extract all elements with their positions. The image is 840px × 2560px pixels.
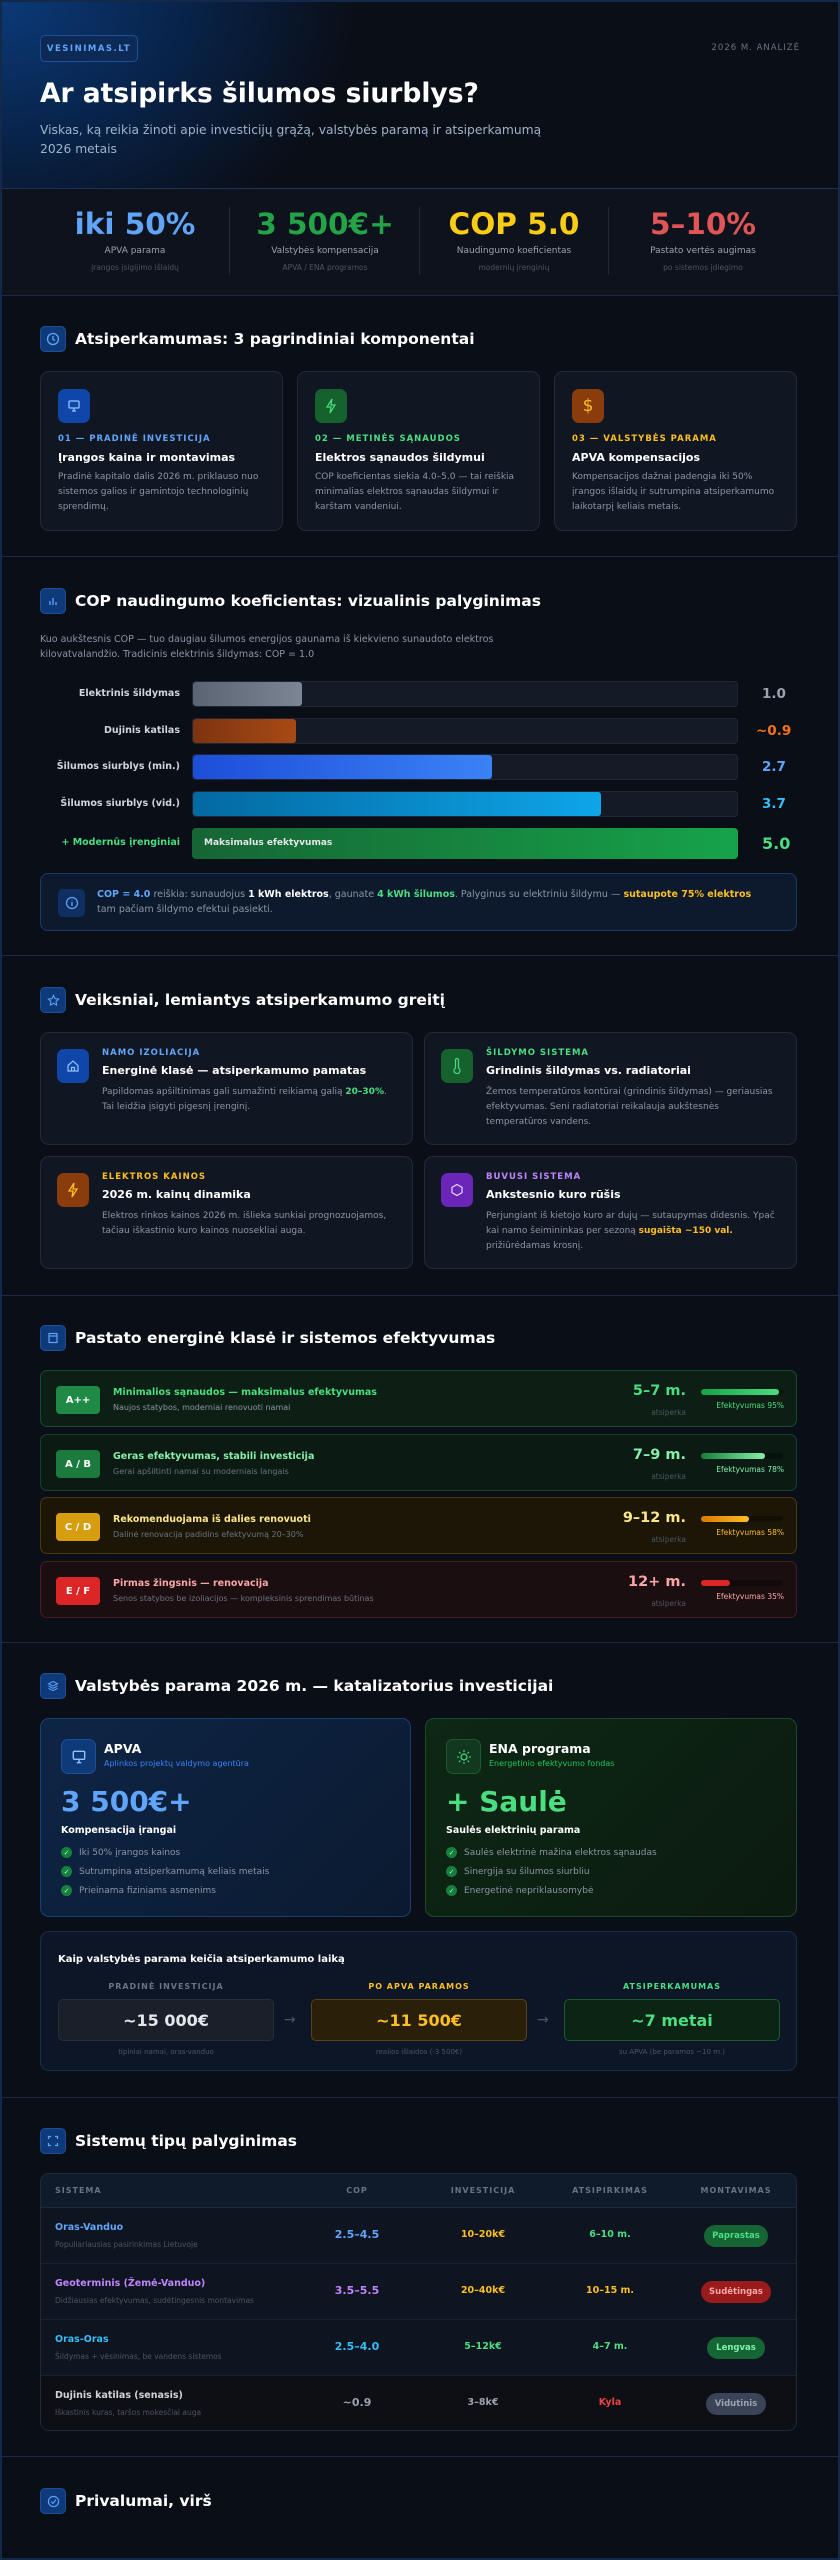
- icon: sun: [446, 1739, 481, 1774]
- bar: modern: 5.0: [762, 834, 790, 853]
- bar: HP min: Šilumos siurblys (min.): [57, 761, 180, 772]
- heading: components: Atsiperkamumas: 3 pagrindiniai komponentai: [75, 330, 475, 348]
- step: initial: ~15 000€: [123, 2010, 209, 2030]
- row: air-air: Lengvas: [716, 2343, 756, 2353]
- row: A/B: Geras efektyvumas, stabili investicija: [113, 1451, 314, 1462]
- row: E/F: Pirmas žingsnis — renovacija: [113, 1578, 269, 1589]
- card: APVA: Kompensacija įrangai: [61, 1825, 176, 1836]
- card: APVA: Aplinkos projektų valdymo agentūra: [104, 1759, 249, 1768]
- row: A/B: Gerai apšiltinti namai su moderniais langais: [113, 1467, 289, 1476]
- card: heating system: [424, 1032, 797, 1145]
- card: state support: [554, 371, 797, 531]
- row: E/F: E / F: [66, 1586, 90, 1596]
- step: after APVA: ~11 500€: [376, 2010, 462, 2030]
- card: ENA: Sinergija su šilumos siurbliu: [464, 1866, 590, 1876]
- heading: factors: Veiksniai, lemiantys atsiperkamumo greitį: [75, 991, 445, 1009]
- icon: dollar: [572, 389, 604, 423]
- row: geothermal: 10–15 m.: [586, 2285, 634, 2296]
- stat: APVA: iki 50%: [75, 207, 195, 241]
- card: state support: APVA kompensacijos: [572, 451, 700, 464]
- step: payback: ATSIPERKAMUMAS: [623, 1982, 721, 1991]
- row: A/B: A / B: [65, 1458, 91, 1470]
- stat: COP: Naudingumo koeficientas: [457, 246, 571, 256]
- stat: value: [650, 207, 756, 272]
- row: air-water: 2.5–4.5: [335, 2228, 379, 2241]
- row: air-water: Populiariausias pasirinkimas Lietuvoje: [55, 2240, 198, 2249]
- bar: gas: Dujinis katilas: [104, 725, 180, 736]
- card: state support: 03 — VALSTYBĖS PARAMA: [572, 434, 717, 444]
- card: APVA: ✓: [64, 1868, 69, 1876]
- row: geothermal: 20–40k€: [461, 2285, 505, 2296]
- card: previous system: [424, 1156, 797, 1269]
- card: previous system: BUVUSI SISTEMA: [486, 1172, 581, 1182]
- step: payback: su APVA (be paramos ~10 m.): [619, 2048, 725, 2056]
- step: after APVA: realios išlaidos (-3 500€): [376, 2048, 462, 2056]
- card: APVA: Sutrumpina atsiperkamumą keliais metais: [79, 1866, 269, 1876]
- row: air-air: [41, 2320, 798, 2376]
- header: [0, 0, 840, 188]
- bar: HP avg: [60, 791, 786, 817]
- bar: HP avg: Šilumos siurblys (vid.): [60, 798, 180, 809]
- card: ENA: Energetinė nepriklausomybė: [464, 1886, 593, 1896]
- card: ENA: ✓: [449, 1848, 454, 1856]
- row: C/D: Efektyvumas 58%: [716, 1528, 784, 1537]
- row: air-water: Paprastas: [712, 2231, 760, 2241]
- card: insulation: NAMO IZOLIACIJA: [102, 1048, 200, 1058]
- row: A/B: 7–9 m.: [633, 1447, 686, 1463]
- step: initial: tipiniai namai, oras-vanduo: [118, 2048, 214, 2056]
- row: gas boiler: Kyla: [599, 2397, 621, 2408]
- row: E/F: atsiperka: [651, 1599, 686, 1608]
- stat: compensation: [256, 207, 394, 272]
- row: A/B: atsiperka: [651, 1472, 686, 1481]
- row: A++: atsiperka: [651, 1408, 686, 1417]
- stat: APVA: APVA parama: [105, 246, 165, 256]
- stats band: [0, 189, 840, 295]
- card: initial investment: Pradinė kapitalo dalis 2026 m. priklauso nuo sistemos galios ir gamintojo technologinių sprendimų.: [58, 472, 258, 512]
- row: gas boiler: Iškastinis kuras, taršos mokesčiai auga: [55, 2408, 201, 2417]
- row: air-air: 5–12k€: [464, 2341, 502, 2352]
- card: ENA: ENA programa: [489, 1741, 591, 1756]
- card: ENA: [425, 1718, 797, 1917]
- bar: electric: 1.0: [762, 686, 786, 702]
- icon: info: [58, 889, 85, 917]
- step: initial: PRADINĖ INVESTICIJA: [108, 1982, 224, 1991]
- card: insulation: Energinė klasė — atsiperkamumo pamatas: [102, 1064, 366, 1077]
- card: state support: Kompensacijos dažnai padengia iki 50% įrangos išlaidų ir sutrumpina atsiperkamumo laikotarpį keliais metais.: [572, 472, 774, 512]
- row: gas boiler: [41, 2376, 798, 2432]
- card: electricity prices: ELEKTROS KAINOS: [102, 1172, 206, 1182]
- heading: advantages: [40, 2488, 212, 2514]
- row: gas boiler: Dujinis katilas (senasis): [55, 2390, 183, 2401]
- title: Ar atsipirks šilumos siurblys?: [40, 78, 479, 109]
- card: heating system: Žemos temperatūros kontūrai (grindinis šildymas) — geriausias efektyvumas. Seni radiatoriai reikalauja aukštesnės temperatūros vandens.: [486, 1087, 773, 1127]
- row: C/D: Rekomenduojama iš dalies renovuoti: [113, 1514, 311, 1525]
- heading: factors: [40, 987, 445, 1013]
- row: C/D: 9–12 m.: [623, 1510, 686, 1526]
- row: geothermal: Didžiausias efektyvumas, sudėtingesnis montavimas: [55, 2296, 254, 2305]
- row: air-air: 4–7 m.: [593, 2341, 627, 2352]
- card: initial investment: Įrangos kaina ir montavimas: [58, 451, 235, 464]
- row: E/F: [40, 1561, 797, 1618]
- stat: APVA: [75, 207, 195, 272]
- step: payback: ~7 metai: [631, 2010, 713, 2030]
- card: initial investment: [40, 371, 283, 531]
- card: insulation: [40, 1032, 413, 1145]
- card: annual costs: Elektros sąnaudos šildymui: [315, 451, 485, 464]
- row: air-air: 2.5–4.0: [335, 2340, 379, 2353]
- bar: gas: ~0.9: [756, 723, 791, 739]
- row: C/D: Dalinė renovacija padidins efektyvumą 20–30%: [113, 1530, 304, 1539]
- heading: system comparison: [40, 2128, 297, 2154]
- row: C/D: atsiperka: [651, 1535, 686, 1544]
- card: annual costs: [297, 371, 540, 531]
- icon: dollar: $: [583, 396, 593, 416]
- row: A/B: Efektyvumas 78%: [716, 1465, 784, 1474]
- row: air-water: Oras-Vanduo: [55, 2222, 123, 2233]
- heading: state support: [40, 1673, 553, 1699]
- card: ENA: + Saulė: [446, 1785, 567, 1818]
- icon: bolt: [315, 389, 347, 423]
- row: A++: 5–7 m.: [633, 1383, 686, 1399]
- row: gas boiler: ~0.9: [343, 2396, 371, 2409]
- row: gas boiler: 3–8k€: [468, 2397, 498, 2408]
- row: A/B: [40, 1434, 797, 1491]
- card: ENA: Saulės elektrinių parama: [446, 1825, 580, 1836]
- icon: monitor: [58, 389, 90, 423]
- stat: COP: modernių įrenginių: [478, 263, 550, 272]
- step: payback: [564, 1982, 780, 2056]
- card: heating system: Grindinis šildymas vs. radiatoriai: [486, 1064, 691, 1077]
- stat: value: po sistemos įdiegimo: [663, 263, 743, 272]
- card: APVA: [40, 1718, 411, 1917]
- heading: components: [40, 326, 475, 352]
- heading: state support: Valstybės parama 2026 m. — katalizatorius investicijai: [75, 1677, 553, 1695]
- table header: INVESTICIJA: [451, 2186, 515, 2195]
- row: geothermal: Sudėtingas: [709, 2287, 763, 2297]
- row: geothermal: 3.5–5.5: [335, 2284, 379, 2297]
- card: annual costs: 02 — METINĖS SĄNAUDOS: [315, 434, 461, 444]
- row: air-air: Oras-Oras: [55, 2334, 109, 2345]
- stat: compensation: Valstybės kompensacija: [271, 246, 379, 256]
- row: A++: Naujos statybos, moderniai renovuoti namai: [113, 1403, 290, 1412]
- card: annual costs: COP koeficientas siekia 4.0–5.0 — tai reiškia minimalias elektros sąnaudas šildymui ir karštam vandeniui.: [315, 472, 514, 512]
- stat: COP: [449, 207, 579, 272]
- bar: HP min: 2.7: [762, 759, 786, 775]
- heading: advantages: Privalumai, virš: [75, 2492, 212, 2510]
- row: A++: [40, 1370, 797, 1427]
- card: previous system: Perjungiant iš kietojo kuro ar dujų — sutaupymas didesnis. Ypač kai namo šeimininkas per sezoną sugaišta ~150 val. prižiūrėdamas krosnį.: [486, 1211, 775, 1251]
- heading: COP: [40, 588, 541, 614]
- bar: modern: [61, 828, 790, 859]
- badge: VESINIMAS.LT: [47, 44, 131, 54]
- card: APVA: Prieinama fiziniams asmenims: [79, 1886, 216, 1896]
- step: initial: [58, 1982, 274, 2056]
- card: electricity prices: 2026 m. kainų dinamika: [102, 1188, 251, 1201]
- bar: electric: [79, 681, 786, 707]
- stat: value: 5–10%: [650, 207, 756, 241]
- bar: modern: + Modernūs įrenginiai: [61, 837, 180, 848]
- bar: HP min: [57, 754, 786, 780]
- icon: house: [57, 1049, 89, 1083]
- table header: COP: [346, 2186, 368, 2195]
- bar: HP avg: 3.7: [762, 796, 786, 812]
- stat: APVA: įrangos įsigijimo išlaidų: [91, 263, 179, 272]
- row: A++: A++: [66, 1394, 90, 1406]
- table header: MONTAVIMAS: [700, 2186, 772, 2195]
- card: APVA: ✓: [64, 1848, 69, 1856]
- stat: compensation: 3 500€+: [256, 207, 394, 241]
- row: geothermal: Geoterminis (Žemė-Vanduo): [55, 2278, 205, 2289]
- card: ENA: Energetinio efektyvumo fondas: [489, 1759, 614, 1768]
- stat: value: Pastato vertės augimas: [650, 246, 756, 256]
- table header: [41, 2174, 798, 2208]
- card: ENA: ✓: [449, 1886, 454, 1894]
- card: insulation: Papildomas apšiltinimas gali sumažinti reikiamą galią 20–30%. Tai leidžia įsigyti pigesnį įrenginį.: [102, 1087, 387, 1112]
- bar: gas: [104, 718, 791, 744]
- card: previous system: Ankstesnio kuro rūšis: [486, 1188, 621, 1201]
- row: air-water: [41, 2208, 798, 2264]
- card: APVA: ✓: [64, 1886, 69, 1894]
- arrow: →: [537, 2012, 549, 2028]
- bar: electric: Elektrinis šildymas: [79, 688, 180, 699]
- payback transformation box: Kaip valstybės parama keičia atsiperkamumo laiką: [58, 1954, 345, 1965]
- badge: [40, 35, 138, 62]
- row: A++: Efektyvumas 95%: [716, 1401, 784, 1410]
- row: C/D: C / D: [65, 1522, 91, 1532]
- row: C/D: [40, 1497, 797, 1554]
- row: gas boiler: Vidutinis: [715, 2399, 757, 2409]
- info callout: [40, 873, 797, 931]
- card: ENA: ✓: [449, 1868, 454, 1876]
- heading: system comparison: Sistemų tipų palyginimas: [75, 2132, 297, 2150]
- stat: COP: COP 5.0: [449, 207, 579, 241]
- card: ENA: Saulės elektrinė mažina elektros sąnaudas: [464, 1848, 657, 1858]
- heading: energy class: Pastato energinė klasė ir sistemos efektyvumas: [75, 1329, 495, 1347]
- payback transformation box: [40, 1931, 797, 2071]
- row: E/F: Efektyvumas 35%: [716, 1592, 784, 1601]
- row: A++: Minimalios sąnaudos — maksimalus efektyvumas: [113, 1387, 377, 1398]
- card: APVA: 3 500€+: [61, 1785, 192, 1818]
- arrow: →: [284, 2012, 296, 2028]
- heading: energy class: [40, 1325, 495, 1351]
- bar chart: [57, 681, 791, 859]
- stat: compensation: APVA / ENA programos: [282, 263, 368, 272]
- row: E/F: 12+ m.: [628, 1574, 686, 1590]
- card: electricity prices: [40, 1156, 413, 1269]
- subtitle: Viskas, ką reikia žinoti apie investicijų grąžą, valstybės paramą ir atsiperkamumą 2026 metais: [40, 123, 541, 156]
- bar: modern: Maksimalus efektyvumas: [204, 838, 332, 848]
- heading: COP: COP naudingumo koeficientas: vizualinis palyginimas: [75, 592, 541, 610]
- icon: thermometer: [441, 1049, 473, 1083]
- date label: 2026 M. ANALIZĖ: [712, 43, 800, 53]
- icon: monitor: [61, 1739, 96, 1774]
- info callout: COP = 4.0 reiškia: sunaudojus 1 kWh elektros, gaunate 4 kWh šilumos. Palyginus su elektriniu šildymu — sutaupote 75% elektros tam pačiam šildymo efektui pasiekti.: [97, 889, 751, 915]
- step: after APVA: PO APVA PARAMOS: [368, 1982, 470, 1991]
- card: electricity prices: Elektros rinkos kainos 2026 m. išlieka sunkiai prognozuojamos, tačiau iškastinio kuro kainos nuosekliai auga.: [102, 1211, 386, 1236]
- icon: hexagon: [441, 1173, 473, 1207]
- icon: bolt: [57, 1173, 89, 1207]
- card: APVA: Iki 50% įrangos kainos: [79, 1848, 180, 1858]
- step: after APVA: [311, 1982, 527, 2056]
- card: initial investment: 01 — PRADINĖ INVESTICIJA: [58, 434, 211, 444]
- row: air-water: 6–10 m.: [589, 2229, 631, 2240]
- row: E/F: Senos statybos be izoliacijos — kompleksinis sprendimas būtinas: [113, 1594, 374, 1603]
- row: air-water: 10–20k€: [461, 2229, 505, 2240]
- COP intro text: Kuo aukštesnis COP — tuo daugiau šilumos energijos gaunama iš kiekvieno sunaudoto elektros kilovatvalandžio. Tradicinis elektrinis šildymas: COP = 1.0: [40, 634, 493, 660]
- card: heating system: ŠILDYMO SISTEMA: [486, 1048, 589, 1058]
- table header: SISTEMA: [55, 2186, 102, 2195]
- card: APVA: APVA: [104, 1741, 141, 1756]
- row: air-air: Šildymas + vėsinimas, be vandens sistemos: [55, 2352, 222, 2361]
- table header: ATSIPIRKIMAS: [572, 2186, 648, 2195]
- comparison table: [40, 2173, 797, 2431]
- row: geothermal: [41, 2264, 798, 2320]
